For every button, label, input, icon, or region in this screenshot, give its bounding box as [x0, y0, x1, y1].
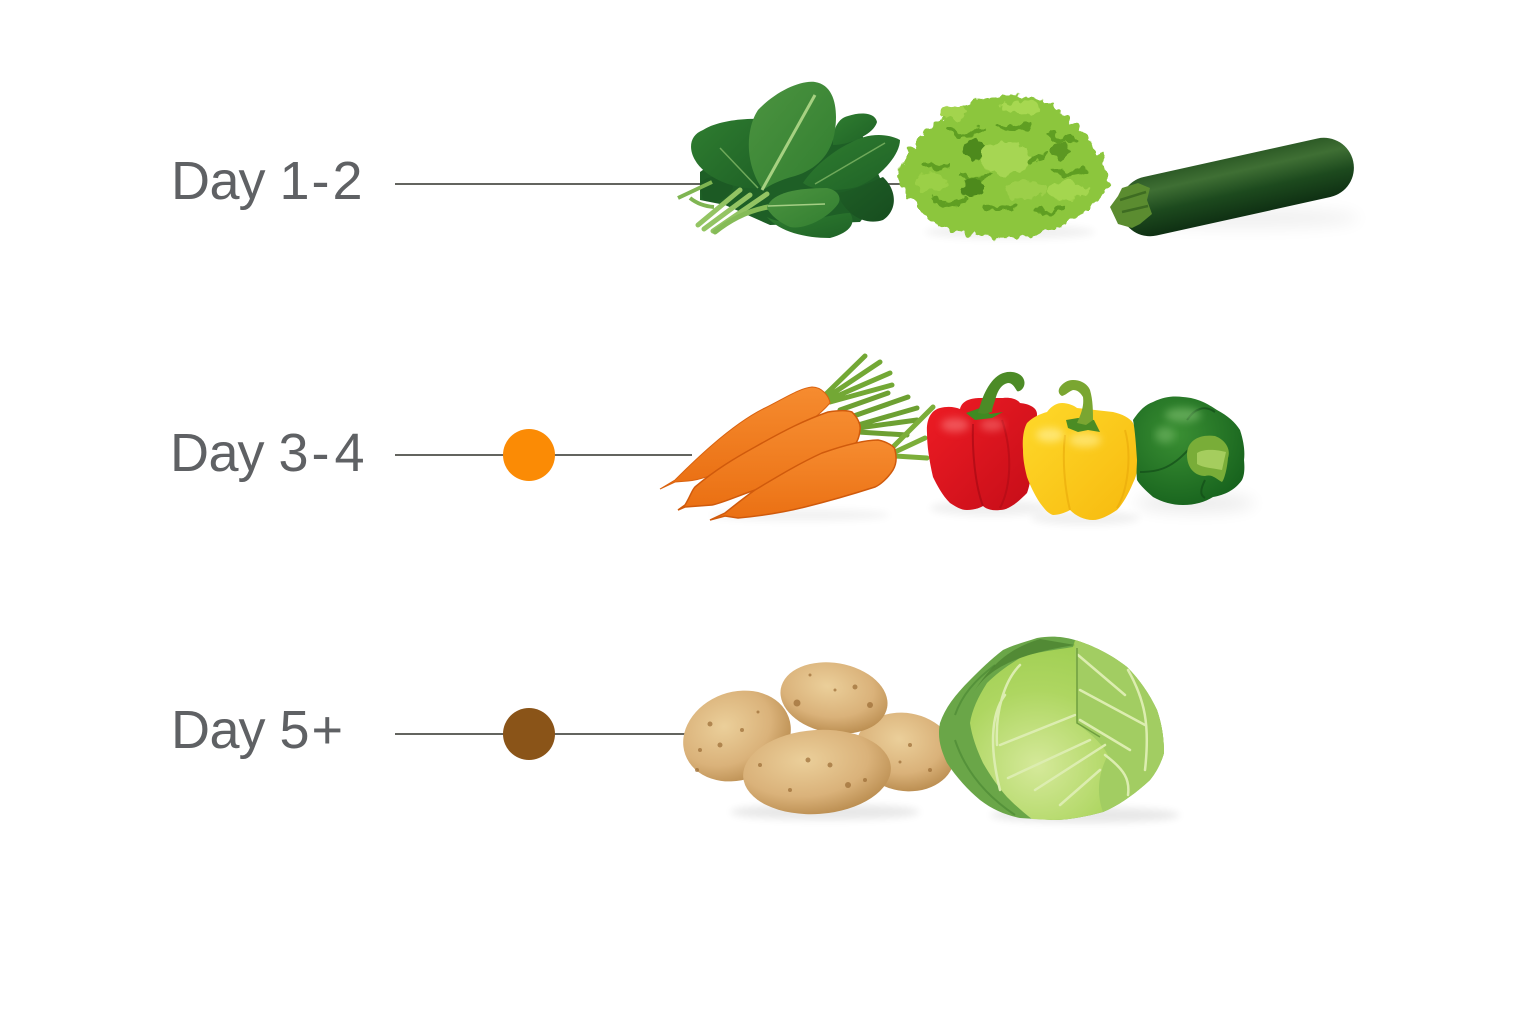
- icon: red pepper: [927, 372, 1050, 516]
- marker: orange dot: [503, 429, 555, 481]
- icon: carrots: [660, 356, 933, 521]
- icon: potatoes: [670, 654, 961, 820]
- icon: green pepper: [1133, 397, 1255, 512]
- connector line: day 5+: [395, 733, 690, 735]
- icon: yellow pepper: [1023, 380, 1140, 525]
- icon: zucchini: [1110, 132, 1360, 242]
- icon: cabbage: [939, 637, 1180, 823]
- connector line: day 3-4: [395, 454, 692, 456]
- icon: lettuce: [897, 95, 1107, 239]
- label: Day 3-4: Day 3-4: [170, 423, 365, 483]
- panel: day 1-2 row: [171, 82, 1360, 242]
- connector line: day 1-2: [395, 183, 915, 185]
- panel: day 3-4 row: [170, 356, 1255, 525]
- marker: brown dot: [503, 708, 555, 760]
- label: Day 5+: Day 5+: [171, 700, 343, 760]
- panel: day 5+ row: [171, 637, 1180, 823]
- icon: spinach: [678, 82, 900, 238]
- label: Day 1-2: Day 1-2: [171, 151, 363, 211]
